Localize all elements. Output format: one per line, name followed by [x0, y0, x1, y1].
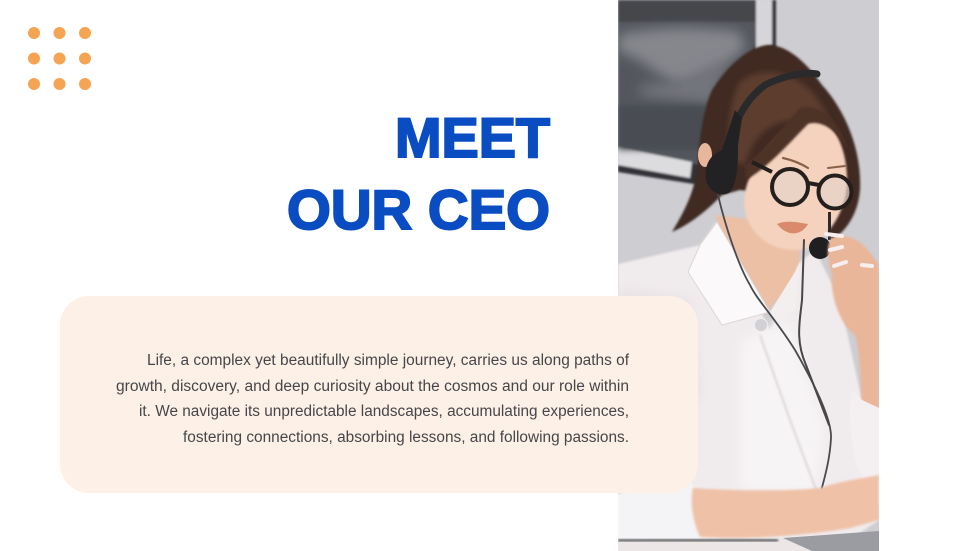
- title: OUR CEO: [287, 178, 550, 241]
- headset cable: [718, 195, 831, 495]
- wall background: [618, 0, 879, 551]
- biography text: it. We navigate its unpredictable landscapes, accumulating experiences,: [139, 403, 629, 420]
- title: MEET: [395, 106, 550, 169]
- shirt collar: [688, 222, 770, 325]
- biography text: growth, discovery, and deep curiosity about the cosmos and our role within: [116, 378, 629, 395]
- shirt button: [754, 318, 768, 332]
- desk and laptop: [618, 540, 812, 551]
- biography text: fostering connections, absorbing lessons, and following passions.: [183, 429, 629, 446]
- forearm and keyboard hand: [692, 475, 879, 538]
- framed painting: [618, 0, 776, 185]
- photo: CEO wearing a headset: [618, 0, 879, 551]
- glasses: [752, 162, 852, 208]
- sleeve at wrist: [860, 398, 879, 476]
- biography text: Life, a complex yet beautifully simple journey, carries us along paths of: [147, 352, 630, 369]
- raised hand: [828, 236, 879, 408]
- headband: [738, 70, 820, 120]
- placket line: [760, 335, 818, 495]
- decorative dot grid: [28, 27, 91, 90]
- panel: biography card: [60, 296, 698, 493]
- neck: [716, 215, 800, 322]
- title: [287, 106, 550, 241]
- ear: [698, 143, 712, 167]
- face: [744, 118, 847, 250]
- shirt: [618, 222, 879, 541]
- hair back: [672, 45, 860, 240]
- biography text: [116, 352, 630, 446]
- earpiece: [706, 110, 742, 194]
- eyebrows and lips: [777, 158, 845, 233]
- microphone: [809, 212, 831, 259]
